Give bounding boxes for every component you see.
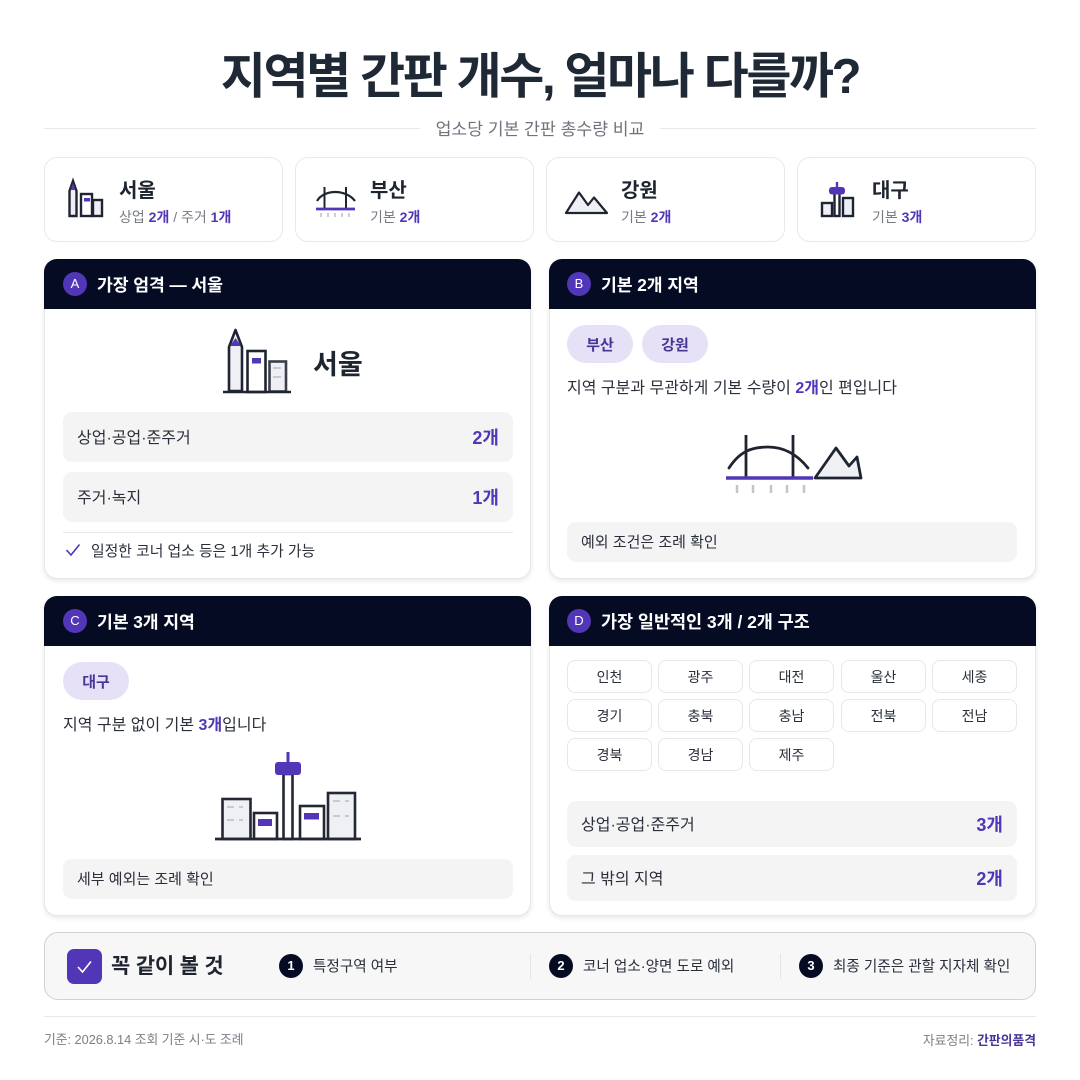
panel D header bbox=[549, 596, 1036, 646]
panel A header: 가장 엄격 — 서울 bbox=[97, 275, 223, 295]
row: commercial 3: 상업·공업·준주거 bbox=[581, 817, 695, 834]
footer: source: 기준: 2026.8.14 조회 기준 시·도 조례 bbox=[44, 1032, 243, 1047]
note: 예외 조건은 조례 확인 bbox=[581, 534, 718, 551]
region chips: 경기 bbox=[597, 708, 622, 724]
item 2 bbox=[549, 954, 734, 978]
region chips: 울산 bbox=[871, 669, 896, 685]
footer: credit: 자료정리: 간판의품격 bbox=[923, 1033, 1036, 1048]
item 3: 3 bbox=[807, 958, 815, 973]
region chips: 경북 bbox=[597, 747, 622, 763]
panel A header bbox=[44, 259, 531, 309]
region chips: 제주 bbox=[779, 747, 804, 763]
card: 서울: 서울 bbox=[119, 180, 156, 202]
row: commercial 2: 2개 bbox=[472, 428, 499, 448]
card: 대구 bbox=[797, 157, 1036, 242]
Seoul label: 서울 bbox=[313, 350, 363, 380]
card: 강원: 기본 2개 bbox=[621, 209, 671, 225]
region chips: 충북 bbox=[688, 708, 713, 724]
region chips: 경남 bbox=[688, 747, 713, 763]
region chips: 광주 bbox=[688, 669, 713, 685]
icon: Seoul skyline large bbox=[223, 328, 291, 394]
pill: 대구 bbox=[63, 662, 129, 700]
panel: D 3개/2개 구조 bbox=[549, 596, 1036, 916]
pill: 부산: 부산 bbox=[586, 337, 614, 354]
note: 세부 예외는 조례 확인 bbox=[77, 871, 214, 888]
icon: Daegu skyline bbox=[215, 752, 361, 840]
item 1 bbox=[279, 954, 398, 978]
checklist heading: 꼭 같이 볼 것 bbox=[111, 955, 224, 978]
panel B header: B bbox=[575, 276, 583, 291]
item 1: 1 bbox=[287, 958, 295, 973]
panel: C 기본 3개 지역 bbox=[44, 596, 531, 916]
description: 지역 구분과 무관하게 기본 수량이 2개인 편입니다 bbox=[567, 380, 897, 397]
pill: 강원: 강원 bbox=[661, 337, 689, 354]
note bbox=[63, 859, 513, 899]
region chips: 인천 bbox=[597, 669, 622, 685]
panel A header: A bbox=[71, 276, 79, 291]
item 1: 특정구역 여부 bbox=[313, 959, 398, 975]
region chips: 세종 bbox=[962, 669, 987, 685]
icon: checkbox bbox=[67, 949, 102, 984]
icon: Busan bridge bbox=[316, 187, 356, 217]
card: 강원 bbox=[546, 157, 785, 242]
item 2: 2 bbox=[557, 958, 565, 973]
subtitle: 업소당 기본 간판 총수량 비교 bbox=[436, 119, 644, 139]
checklist bar bbox=[44, 932, 1036, 1000]
card: 서울 bbox=[44, 157, 283, 242]
panel C header: C bbox=[70, 613, 80, 628]
row: commercial 2: 상업·공업·준주거 bbox=[77, 430, 191, 447]
description: 지역 구분 없이 기본 3개입니다 bbox=[63, 717, 266, 734]
card: 강원: 강원 bbox=[621, 180, 658, 202]
panel: B 기본 2개 지역 bbox=[549, 259, 1036, 579]
pill: 대구: 대구 bbox=[82, 674, 110, 691]
panel C header: 기본 3개 지역 bbox=[97, 612, 195, 632]
item 3: 최종 기준은 관할 지자체 확인 bbox=[833, 959, 1010, 975]
icon: Seoul skyline bbox=[68, 178, 104, 218]
panel D header: 가장 일반적인 3개 / 2개 구조 bbox=[601, 612, 810, 632]
icon: bridge and mountain bbox=[726, 435, 862, 493]
card: 부산: 기본 2개 bbox=[370, 209, 420, 225]
card: 서울: 상업 2개 / 주거 1개 bbox=[119, 209, 231, 225]
pill: 부산 bbox=[567, 325, 633, 363]
panel: A 서울 bbox=[44, 259, 531, 579]
item 2: 코너 업소·양면 도로 예외 bbox=[583, 959, 734, 975]
title: 지역별 간판 개수, 얼마나 다를까? bbox=[221, 50, 859, 104]
panel B header bbox=[549, 259, 1036, 309]
card: 대구: 대구 bbox=[872, 180, 909, 202]
row: commercial 3: 3개 bbox=[976, 815, 1003, 835]
row: other 2 bbox=[567, 855, 1017, 901]
panel B header: 기본 2개 지역 bbox=[601, 275, 699, 295]
note with check: 일정한 코너 업소 등은 1개 추가 가능 bbox=[91, 544, 315, 560]
row: residential 1: 1개 bbox=[472, 488, 499, 508]
item 3 bbox=[799, 954, 1010, 978]
row: residential 1 bbox=[63, 472, 513, 522]
row: residential 1: 주거·녹지 bbox=[77, 490, 141, 507]
region chips bbox=[567, 660, 1017, 771]
panel D header: D bbox=[574, 613, 584, 628]
card: 부산: 부산 bbox=[370, 180, 407, 202]
row: other 2: 2개 bbox=[976, 869, 1003, 889]
region chips: 전남 bbox=[962, 708, 987, 724]
note bbox=[567, 522, 1017, 562]
panel C header bbox=[44, 596, 531, 646]
card: 부산 bbox=[295, 157, 534, 242]
row: other 2: 그 밖의 지역 bbox=[581, 871, 664, 888]
region chips: 충남 bbox=[779, 708, 804, 724]
row: commercial 3 bbox=[567, 801, 1017, 847]
icon: Daegu tower bbox=[820, 182, 854, 218]
row: commercial 2 bbox=[63, 412, 513, 462]
region chips: 대전 bbox=[779, 669, 804, 685]
card: 대구: 기본 3개 bbox=[872, 209, 922, 225]
icon: Gangwon mountains bbox=[564, 191, 608, 214]
region chips: 전북 bbox=[871, 708, 896, 724]
pill: 강원 bbox=[642, 325, 708, 363]
